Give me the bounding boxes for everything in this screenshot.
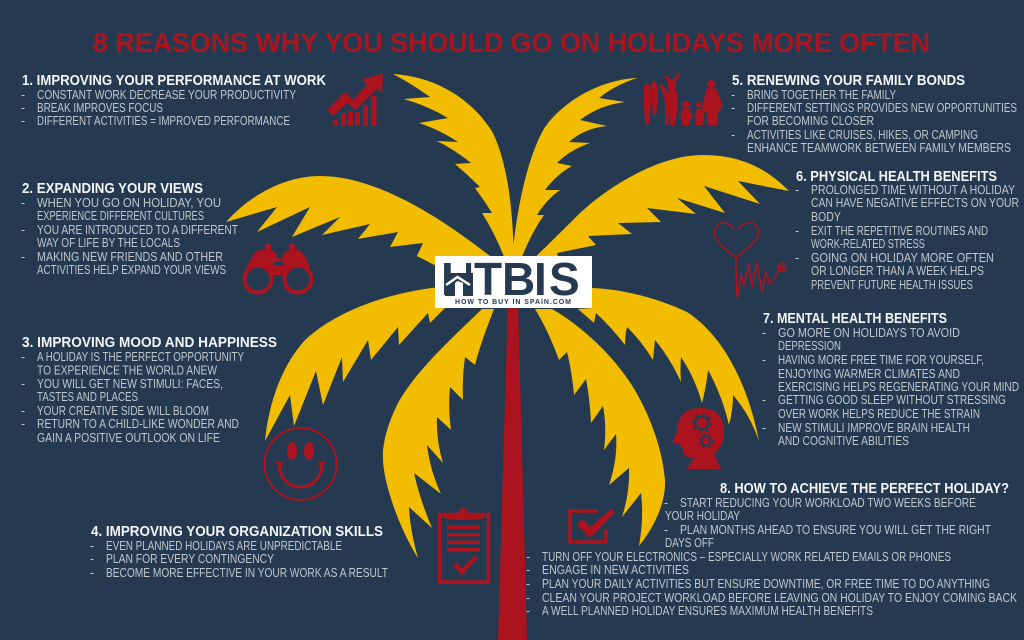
text: reason 8 bullets: A WELL PLANNED HOLIDAY ENSURES MAXIMUM HEALTH BENEFITS	[542, 604, 873, 618]
text: reason 8 bullets	[526, 496, 1018, 618]
text: reason 4 bullets: -	[90, 539, 94, 553]
text: reason 7 bullets: -	[762, 421, 766, 435]
palm tree	[226, 74, 789, 640]
text: reason 7 bullets: DEPRESSION	[778, 339, 841, 353]
text: reason 3 bullets: YOUR CREATIVE SIDE WILL BLOOM	[37, 404, 209, 418]
text: reason 3 bullets: TASTES AND PLACES	[37, 390, 138, 404]
logo wordmark: HTBIS	[441, 253, 580, 305]
icon: head with gears	[672, 408, 724, 469]
palm trunk	[498, 300, 527, 640]
heading 5: 5. RENEWING YOUR FAMILY BONDS	[732, 73, 965, 89]
text: reason 2 bullets: -	[21, 223, 25, 237]
text: reason 6 bullets: BODY	[811, 210, 842, 224]
text: reason 8 bullets: -	[526, 550, 530, 564]
icon: clipboard	[440, 508, 488, 582]
panel: reason 5	[731, 73, 1017, 155]
text: reason 3 bullets: GAIN A POSITIVE OUTLOOK ON LIFE	[37, 431, 220, 445]
text: reason 8 bullets: -	[526, 604, 530, 618]
text: reason 6 bullets: -	[795, 183, 799, 197]
text: reason 8 bullets: -	[664, 523, 668, 537]
text: reason 3 bullets: YOU WILL GET NEW STIMULI: FACES,	[37, 377, 223, 391]
text: reason 5 bullets: -	[731, 88, 735, 102]
icon: house in logo	[445, 261, 473, 296]
text: reason 7 bullets: GO MORE ON HOLIDAYS TO AVOID	[778, 326, 960, 340]
text: reason 7 bullets: -	[762, 393, 766, 407]
text: reason 4 bullets: PLAN FOR EVERY CONTINGENCY	[106, 552, 275, 566]
text: reason 8 bullets: DAYS OFF	[665, 536, 714, 550]
panel: reason 7	[762, 311, 1019, 448]
text: reason 3 bullets: RETURN TO A CHILD-LIKE WONDER AND	[37, 417, 239, 431]
text: reason 2 bullets	[21, 196, 238, 277]
text: reason 7 bullets	[762, 326, 1019, 448]
text: reason 3 bullets: -	[21, 404, 25, 418]
text: reason 2 bullets: -	[21, 250, 25, 264]
text: reason 8 bullets: -	[526, 563, 530, 577]
text: reason 4 bullets: EVEN PLANNED HOLIDAYS ARE UNPREDICTABLE	[106, 539, 342, 553]
frond: middle left	[226, 176, 505, 268]
icon: family	[644, 72, 722, 125]
icon: growth chart	[327, 74, 383, 126]
text: reason 2 bullets: WHEN YOU GO ON HOLIDAY, YOU	[37, 196, 221, 210]
heading 2: 2. EXPANDING YOUR VIEWS	[22, 181, 203, 197]
logo	[435, 253, 592, 308]
text: reason 1 bullets: -	[21, 101, 25, 115]
heading 7: 7. MENTAL HEALTH BENEFITS	[763, 311, 947, 327]
text: reason 5 bullets	[731, 88, 1017, 155]
text: reason 3 bullets: -	[21, 377, 25, 391]
frond: top left	[393, 74, 514, 262]
frond: top right	[512, 78, 637, 262]
frond: lower centre right	[535, 309, 665, 546]
icon: checkbox	[570, 509, 615, 542]
text: reason 7 bullets: -	[762, 326, 766, 340]
text: reason 5 bullets: -	[731, 128, 735, 142]
panel: reason 2	[21, 181, 238, 277]
panel: reason 1	[21, 73, 326, 128]
text: reason 2 bullets: YOU ARE INTRODUCED TO A DIFFERENT	[37, 223, 238, 237]
text: reason 1 bullets: BREAK IMPROVES FOCUS	[37, 101, 163, 115]
title: 8 REASONS WHY YOU SHOULD GO ON HOLIDAYS MORE OFTEN	[93, 27, 930, 58]
text: reason 6 bullets	[795, 183, 1019, 292]
text: reason 7 bullets: NEW STIMULI IMPROVE BRAIN HEALTH	[778, 421, 970, 435]
text: reason 1 bullets: CONSTANT WORK DECREASE YOUR PRODUCTIVITY	[37, 88, 297, 102]
text: reason 2 bullets: MAKING NEW FRIENDS AND OTHER	[37, 250, 223, 264]
text: reason 8 bullets: -	[526, 577, 530, 591]
text: reason 3 bullets	[21, 350, 245, 445]
text: reason 2 bullets: -	[21, 196, 25, 210]
text: reason 4 bullets: BECOME MORE EFFECTIVE IN YOUR WORK AS A RESULT	[106, 566, 388, 580]
text: reason 8 bullets: ENGAGE IN NEW ACTIVITIES	[542, 563, 689, 577]
text: reason 1 bullets	[21, 88, 297, 128]
text: reason 7 bullets: ENJOYING WARMER CLIMATES AND	[778, 367, 960, 381]
text: reason 3 bullets: TO EXPERIENCE THE WORLD ANEW	[37, 364, 217, 378]
heading 3: 3. IMPROVING MOOD AND HAPPINESS	[22, 335, 277, 351]
logo tagline: HOW TO BUY IN SPAIN.COM	[455, 299, 571, 306]
frond: lower left	[265, 287, 445, 441]
text: reason 2 bullets: ACTIVITIES HELP EXPAND YOUR VIEWS	[37, 263, 226, 277]
text: reason 8 bullets: -	[526, 591, 530, 605]
icon: binoculars	[244, 244, 312, 292]
palm fronds	[226, 74, 789, 558]
panel: reason 8	[526, 481, 1018, 618]
text: reason 7 bullets: -	[762, 353, 766, 367]
text: reason 4 bullets: -	[90, 566, 94, 580]
heading 1: 1. IMPROVING YOUR PERFORMANCE AT WORK	[22, 73, 326, 89]
panel: reason 3	[21, 335, 277, 445]
icon: smiley	[264, 428, 336, 500]
text: reason 5 bullets: BRING TOGETHER THE FAMILY	[747, 88, 897, 102]
text: reason 4 bullets	[90, 539, 388, 580]
frond: middle right	[530, 155, 789, 262]
text: reason 5 bullets: -	[731, 101, 735, 115]
text: reason 5 bullets: FOR BECOMING CLOSER	[747, 114, 874, 128]
text: reason 8 bullets: -	[664, 496, 668, 510]
text: reason 1 bullets: -	[21, 88, 25, 102]
text: reason 3 bullets: -	[21, 417, 25, 431]
text: reason 7 bullets: AND COGNITIVE ABILITIES	[778, 434, 909, 448]
text: reason 6 bullets: OR LONGER THAN A WEEK HELPS	[811, 264, 984, 278]
text: reason 6 bullets: WORK-RELATED STRESS	[811, 237, 925, 251]
text: reason 6 bullets: -	[795, 251, 799, 265]
text: reason 3 bullets: -	[21, 350, 25, 364]
text: reason 6 bullets: GOING ON HOLIDAY MORE OFTEN	[811, 251, 994, 265]
text: reason 6 bullets: PREVENT FUTURE HEALTH ISSUES	[811, 278, 973, 292]
text: reason 4 bullets: -	[90, 552, 94, 566]
text: reason 1 bullets: DIFFERENT ACTIVITIES = IMPROVED PERFORMANCE	[37, 114, 290, 128]
text: reason 1 bullets: -	[21, 114, 25, 128]
panel: reason 4	[90, 524, 388, 580]
text: reason 6 bullets: -	[795, 224, 799, 238]
text: reason 2 bullets: WAY OF LIFE BY THE LOCALS	[37, 236, 180, 250]
panel: reason 6	[795, 169, 1019, 292]
icon: heart stethoscope	[715, 223, 786, 298]
heading 6: 6. PHYSICAL HEALTH BENEFITS	[796, 169, 997, 185]
heading 4: 4. IMPROVING YOUR ORGANIZATION SKILLS	[91, 524, 383, 540]
frond: lower right	[578, 288, 759, 441]
logo background	[435, 256, 592, 308]
frond: lower centre left	[383, 309, 494, 558]
text: reason 3 bullets: A HOLIDAY IS THE PERFECT OPPORTUNITY	[37, 350, 245, 364]
text: reason 2 bullets: EXPERIENCE DIFFERENT CULTURES	[37, 209, 204, 223]
text: reason 8 bullets: YOUR HOLIDAY	[665, 509, 741, 523]
